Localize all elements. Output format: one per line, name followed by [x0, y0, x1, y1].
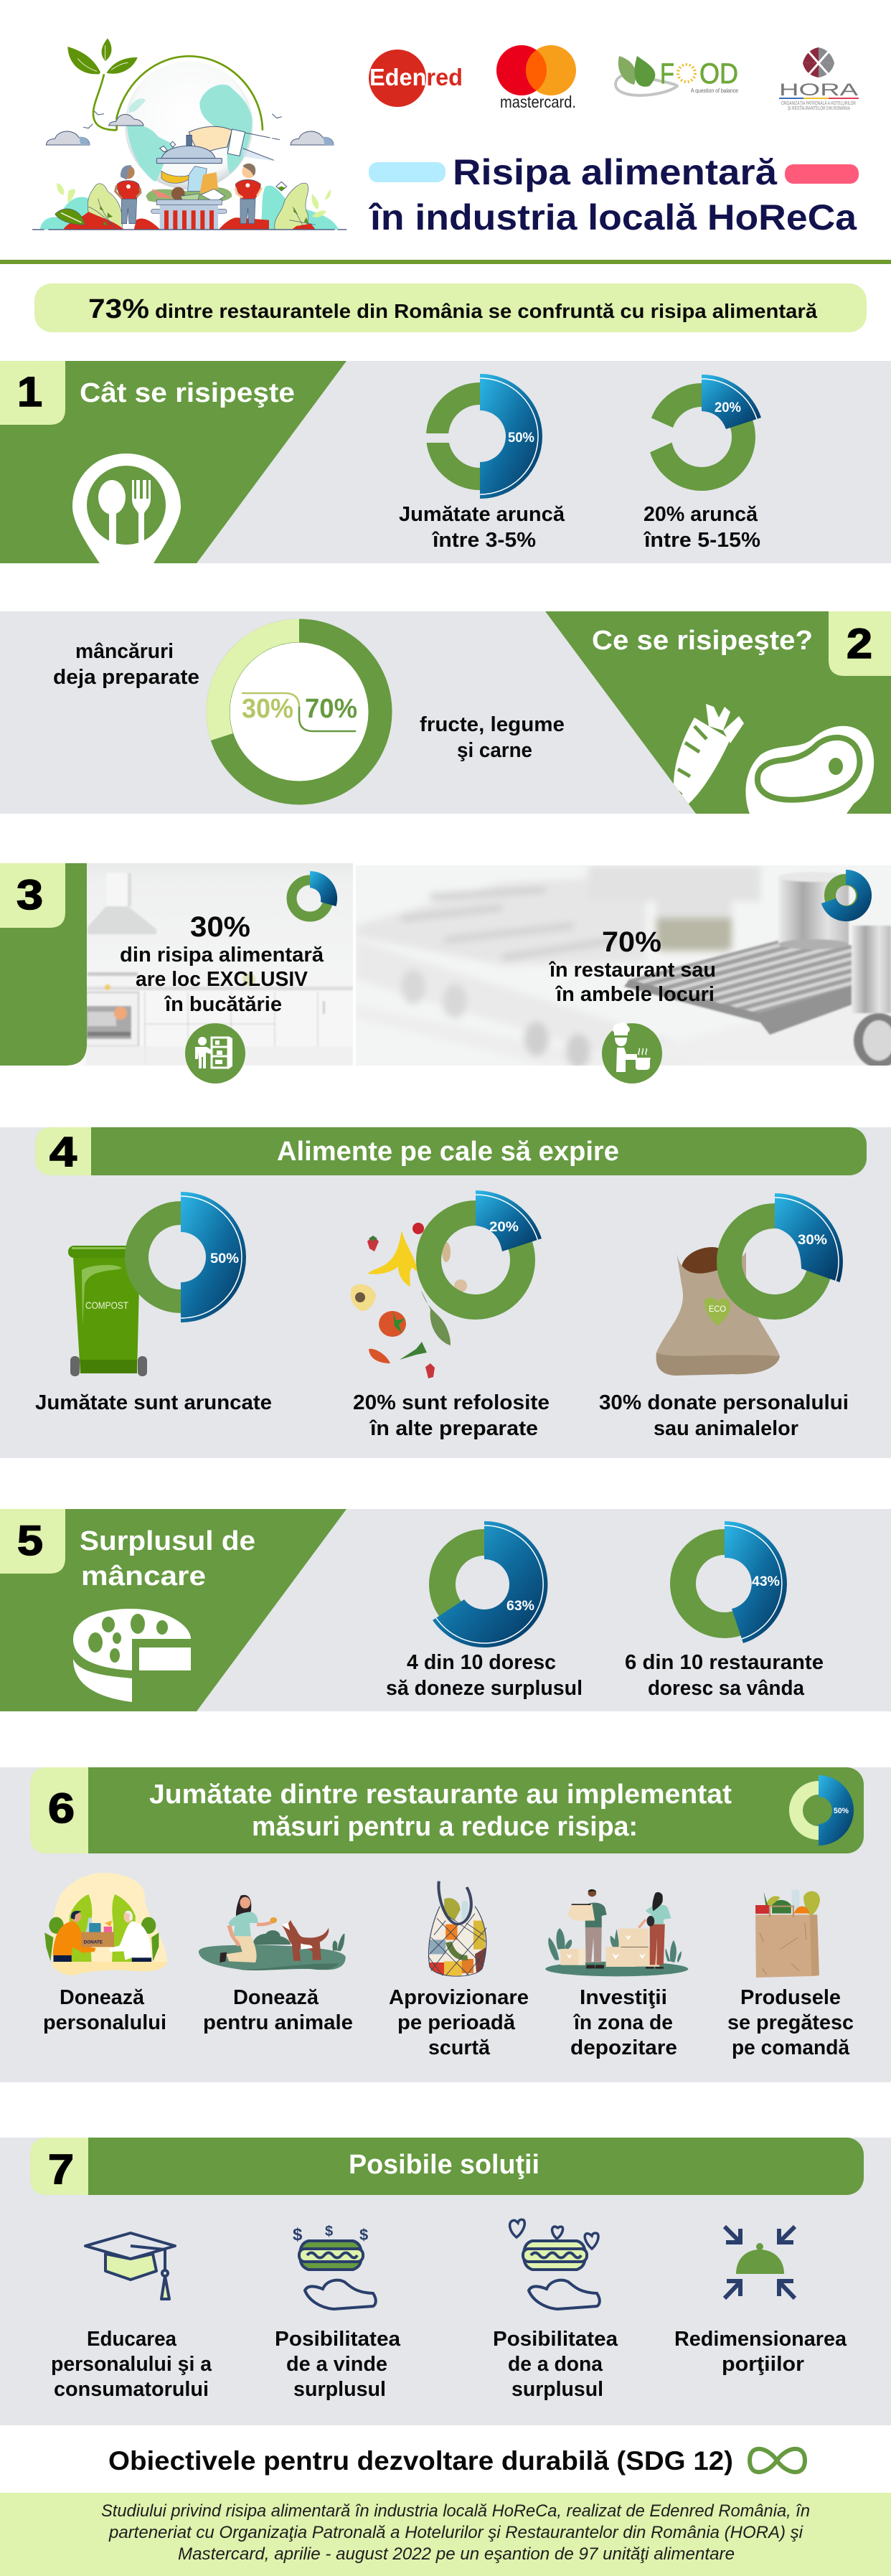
- label: 6 din 10: doresc sa vânda: [648, 1677, 805, 1700]
- text: 30%: are loc EXCLUSIV: [136, 968, 308, 991]
- panel 7: posibile soluţii: [0, 2138, 891, 2425]
- panel 1: cât se risipeşte: [0, 361, 891, 563]
- text: 70%: 70%: [602, 926, 661, 958]
- birds: [83, 111, 282, 128]
- logo: HORA: [779, 47, 859, 111]
- label: fructe, legume şi carne: fructe, legume: [420, 713, 565, 736]
- text: 30%: din risipa alimentară: [120, 944, 324, 967]
- ground foliage: [40, 182, 339, 230]
- label: 20% aruncă: între 5-15%: [643, 529, 760, 552]
- label: redimensionarea: [674, 2328, 847, 2376]
- label: jumătate aruncă: [399, 503, 565, 552]
- panel 2: ce se risipeşte: [0, 611, 891, 814]
- label: donează pentru animale: Donează: [233, 1986, 319, 2009]
- label: jumătate aruncă: între 3-5%: [431, 529, 536, 552]
- chart: donut 63%: [433, 1521, 547, 1647]
- heading bar 7: 7: [48, 2146, 74, 2193]
- label: donează personalului: personalului: [43, 2011, 166, 2034]
- number tab 2: [829, 611, 891, 676]
- icon: compost bin: COMPOST: [85, 1299, 128, 1311]
- heading bar 4: Alimente pe cale să expire: [277, 1137, 619, 1167]
- label: investiţii: depozitare: [570, 2036, 677, 2059]
- heading bar 7: Posibile soluţii: [349, 2150, 539, 2180]
- label: educarea: consumatorului: [54, 2378, 209, 2401]
- label: de a vinde: de a vinde: [286, 2353, 387, 2376]
- panel 5: surplusul de mâncare: [0, 1509, 891, 1711]
- illustration: boxes in storage: [545, 1889, 688, 1976]
- label: 20% refolosite: în alte preparate: [369, 1417, 538, 1440]
- icon: dish to sell: [293, 2224, 376, 2309]
- label: donează personalului: Donează: [60, 1986, 145, 2009]
- logo: Mastercard: mastercard.: [500, 93, 576, 111]
- footer source note: [0, 2493, 891, 2576]
- chart: donut 50%: 50%: [508, 431, 534, 446]
- logo: HORA: ORGANIZAŢIA PATRONALĂ A HOTELURILOR: [781, 100, 856, 106]
- label: 30% donate: sau animalelor: [654, 1417, 798, 1440]
- number tab 1: [0, 361, 65, 425]
- label: mâncăruri deja preparate: deja preparate: [53, 666, 199, 689]
- chart: donut 30% / 70%: 30%: [242, 694, 293, 724]
- illustration: donation to staff: DONATE: [84, 1939, 103, 1945]
- icon: carrot: [674, 704, 744, 811]
- heading bar 6: [30, 1767, 864, 1853]
- number tab 1: 1: [17, 369, 42, 415]
- footer source note: parteneriat cu Organizaţia Patronală a Hotelurilor şi Restaurantelor din România (HORA) şi: [108, 2523, 803, 2542]
- right person: [235, 164, 262, 224]
- text: 70%: [548, 926, 716, 1006]
- hand lifting cloche: [156, 126, 280, 164]
- logo: Edenred: [369, 50, 463, 107]
- logo: Mastercard: [496, 45, 576, 111]
- chart: donut 43%: [683, 1521, 787, 1643]
- heading 5: Surplusul de: [80, 1526, 255, 1556]
- logo: FOOD: F: [660, 58, 674, 90]
- chart: donut 30% / 70%: 70%: [305, 694, 357, 724]
- icon: burlap sack: [656, 1247, 780, 1376]
- text: 30%: [120, 911, 324, 1016]
- illustration: donation to staff: [44, 1873, 167, 1975]
- label: 6 din 10: 6 din 10 restaurante: [625, 1651, 824, 1674]
- headline callout: [34, 283, 867, 332]
- chart: donut 50%: 50%: [210, 1251, 239, 1266]
- heading 5: mâncare: [81, 1561, 206, 1592]
- logo: FOOD: A question of balance: [691, 88, 738, 94]
- heading bar 7: [30, 2138, 864, 2195]
- label: de a vinde: surplusul: [293, 2378, 386, 2401]
- chart: donut 20%: 20%: [489, 1220, 519, 1235]
- chart: donut 43%: 43%: [752, 1574, 780, 1589]
- illustration: feeding a dog: [199, 1895, 346, 1970]
- icon: cheese: [73, 1609, 191, 1702]
- heading 2: Ce se risipeşte?: [592, 626, 813, 656]
- icon: dish to donate: [510, 2219, 600, 2309]
- label: aprovizionare: scurtă: [428, 2036, 491, 2059]
- icon: dish to sell: $: [359, 2226, 368, 2244]
- label: donează pentru animale: pentru animale: [203, 2011, 353, 2034]
- label: 30% donate: [599, 1391, 849, 1440]
- chart: donut 63%: 63%: [506, 1599, 534, 1614]
- headline callout: dintre restaurantele din România se confruntă cu risipa alimentară: [155, 300, 817, 322]
- illustration: paper grocery bag: [755, 1889, 820, 1978]
- panel 3: unde se risipeşte: [0, 863, 891, 1083]
- label: investiţii: [570, 1986, 677, 2059]
- panel 6: măsuri implementate: [0, 1767, 891, 2082]
- label: produsele: se pregătesc: [727, 2011, 854, 2034]
- label: aprovizionare: [389, 1986, 529, 2059]
- SDG heading: Obiectivele pentru dezvoltare durabilă (SDG 12): [108, 2446, 733, 2476]
- headline callout: 73%: [88, 294, 149, 324]
- number tab 3: 3: [16, 872, 43, 918]
- chart: donut 30%: [729, 1193, 843, 1307]
- icon: graduation cap: [85, 2233, 175, 2299]
- title: Risipa alimentară: [453, 152, 778, 192]
- heading bar 4: [35, 1127, 867, 1175]
- chart: donut 30% / 70%: [206, 619, 380, 793]
- label: 4 din 10: 4 din 10 doresc: [407, 1651, 556, 1674]
- icon: compost bin: [68, 1246, 147, 1376]
- label: educarea: Educarea: [87, 2328, 177, 2351]
- number tab 5: [0, 1509, 65, 1574]
- label: 20% aruncă: [643, 503, 760, 552]
- chart: donut 20%: [429, 1190, 542, 1307]
- icon: dish to sell: $: [325, 2224, 333, 2239]
- food pile: [146, 166, 232, 207]
- label: educarea: [51, 2328, 212, 2401]
- label: redimensionarea: Redimensionarea: [674, 2328, 847, 2351]
- text: 30%: 30%: [190, 911, 250, 943]
- chart: small donut 70%: [821, 870, 872, 921]
- label: de a vinde: Posibilitatea: [275, 2328, 401, 2351]
- label: mâncăruri deja preparate: mâncăruri: [75, 640, 174, 663]
- label: 4 din 10: [386, 1651, 583, 1700]
- chart: small donut 50%: [796, 1775, 854, 1846]
- label: aprovizionare: pe perioadă: [397, 2011, 516, 2034]
- label: produsele: [727, 1986, 854, 2059]
- text: 70%: în ambele locuri: [555, 983, 715, 1006]
- label: de a dona: Posibilitatea: [493, 2328, 618, 2351]
- label: jumătate aruncă: Jumătate aruncă: [399, 503, 565, 526]
- label: de a vinde: [275, 2328, 401, 2401]
- label: jumătate sunt aruncate: Jumătate sunt aruncate: [35, 1391, 272, 1414]
- icon: infinity: [750, 2449, 805, 2472]
- heading 5: [80, 1526, 255, 1592]
- ground line: [32, 228, 346, 231]
- label: 6 din 10: [625, 1651, 824, 1700]
- clouds: [46, 114, 334, 145]
- chart: donut 50%: [422, 374, 542, 499]
- footer source note: Studiului privind risipa alimentară în industria locală HoReCa, realizat de Edenred România, în: [101, 2501, 810, 2521]
- label: 4 din 10: să doneze surplusul: [386, 1677, 583, 1700]
- label: investiţii: în zona de: [572, 2011, 673, 2034]
- logo: Edenred: Edenred: [369, 64, 463, 90]
- label: 20% refolosite: [353, 1391, 550, 1440]
- label: fructe, legume şi carne: [420, 713, 565, 762]
- header illustration: globe, cloche and waste bin: [32, 38, 346, 230]
- label: produsele: Produsele: [740, 1986, 841, 2009]
- green side bar: [0, 863, 87, 1066]
- photo: kitchen: [85, 863, 353, 1066]
- waste bin: [151, 199, 227, 230]
- icon: food scraps: [351, 1223, 467, 1378]
- label: aprovizionare: Aprovizionare: [389, 1986, 529, 2009]
- label: redimensionarea: porţiilor: [722, 2353, 804, 2376]
- chart: donut 20%: [644, 375, 761, 479]
- text: 70%: în restaurant sau: [548, 959, 716, 982]
- icon: person at fridge: [185, 1023, 245, 1083]
- chart: donut 50%: [136, 1192, 246, 1322]
- label: mâncăruri deja preparate: [53, 640, 199, 689]
- label: donează personalului: [43, 1986, 166, 2034]
- label: educarea: personalului şi a: [51, 2353, 212, 2376]
- heading bar 6: 6: [48, 1785, 75, 1832]
- chart: small donut 30%: [291, 871, 337, 917]
- label: 20% aruncă: 20% aruncă: [644, 503, 758, 526]
- logo: Edenred: Edenred: [369, 64, 463, 90]
- label: de a dona: surplusul: [512, 2378, 603, 2401]
- heading bar 6: Jumătate dintre restaurante au implementat: [149, 1780, 732, 1810]
- globe: [125, 62, 253, 189]
- title: [368, 152, 859, 238]
- label: 30% donate: 30% donate personalului: [599, 1391, 849, 1414]
- footer source note: Mastercard, aprilie - august 2022 pe un eşantion de 97 unităţi alimentare: [178, 2544, 735, 2564]
- number tab 2: 2: [847, 621, 872, 667]
- icon: burlap sack: ECO: [709, 1304, 726, 1314]
- chart: donut 20%: 20%: [715, 400, 741, 415]
- label: 20% refolosite: 20% sunt refolosite: [353, 1391, 550, 1414]
- icon: meat: [745, 726, 874, 814]
- photo: stove: [356, 865, 891, 1068]
- label: de a dona: [493, 2328, 618, 2401]
- chart: donut 30%: 30%: [798, 1233, 827, 1248]
- label: produsele: pe comandă: [732, 2036, 850, 2059]
- icon: chef with pot: [602, 1023, 662, 1083]
- sprout and green arc: [67, 38, 263, 131]
- text: 30%: în bucătărie: [164, 993, 282, 1016]
- heading 1: Cât se risipeşte: [80, 378, 295, 408]
- title: în industria locală HoReCa: [368, 197, 857, 238]
- icon: dish to sell: $: [293, 2225, 303, 2244]
- icon: plate with spoon and fork: [72, 453, 181, 563]
- illustration: string bag: [428, 1881, 486, 1977]
- left person: [116, 165, 141, 224]
- label: de a dona: de a dona: [508, 2353, 603, 2376]
- logo: HORA: HORA: [779, 80, 858, 100]
- heading bar 4: 4: [50, 1129, 77, 1175]
- label: donează pentru animale: [203, 1986, 353, 2034]
- chart: small donut 50%: 50%: [834, 1807, 849, 1815]
- panel 4: alimente pe cale să expire: [0, 1127, 891, 1458]
- logo: HORA: ŞI RESTAURANTELOR DIN ROMÂNIA: [788, 105, 850, 111]
- number tab 5: 5: [17, 1518, 43, 1564]
- label: fructe, legume şi carne: şi carne: [457, 739, 532, 762]
- logo: FOOD: OD: [699, 58, 738, 90]
- heading bar 6: măsuri pentru a reduce risipa:: [252, 1812, 638, 1842]
- number tab 3: [0, 863, 65, 928]
- logo: FOOD: [616, 56, 738, 95]
- icon: portion resizing: [725, 2227, 795, 2298]
- label: investiţii: Investiţii: [580, 1986, 667, 2009]
